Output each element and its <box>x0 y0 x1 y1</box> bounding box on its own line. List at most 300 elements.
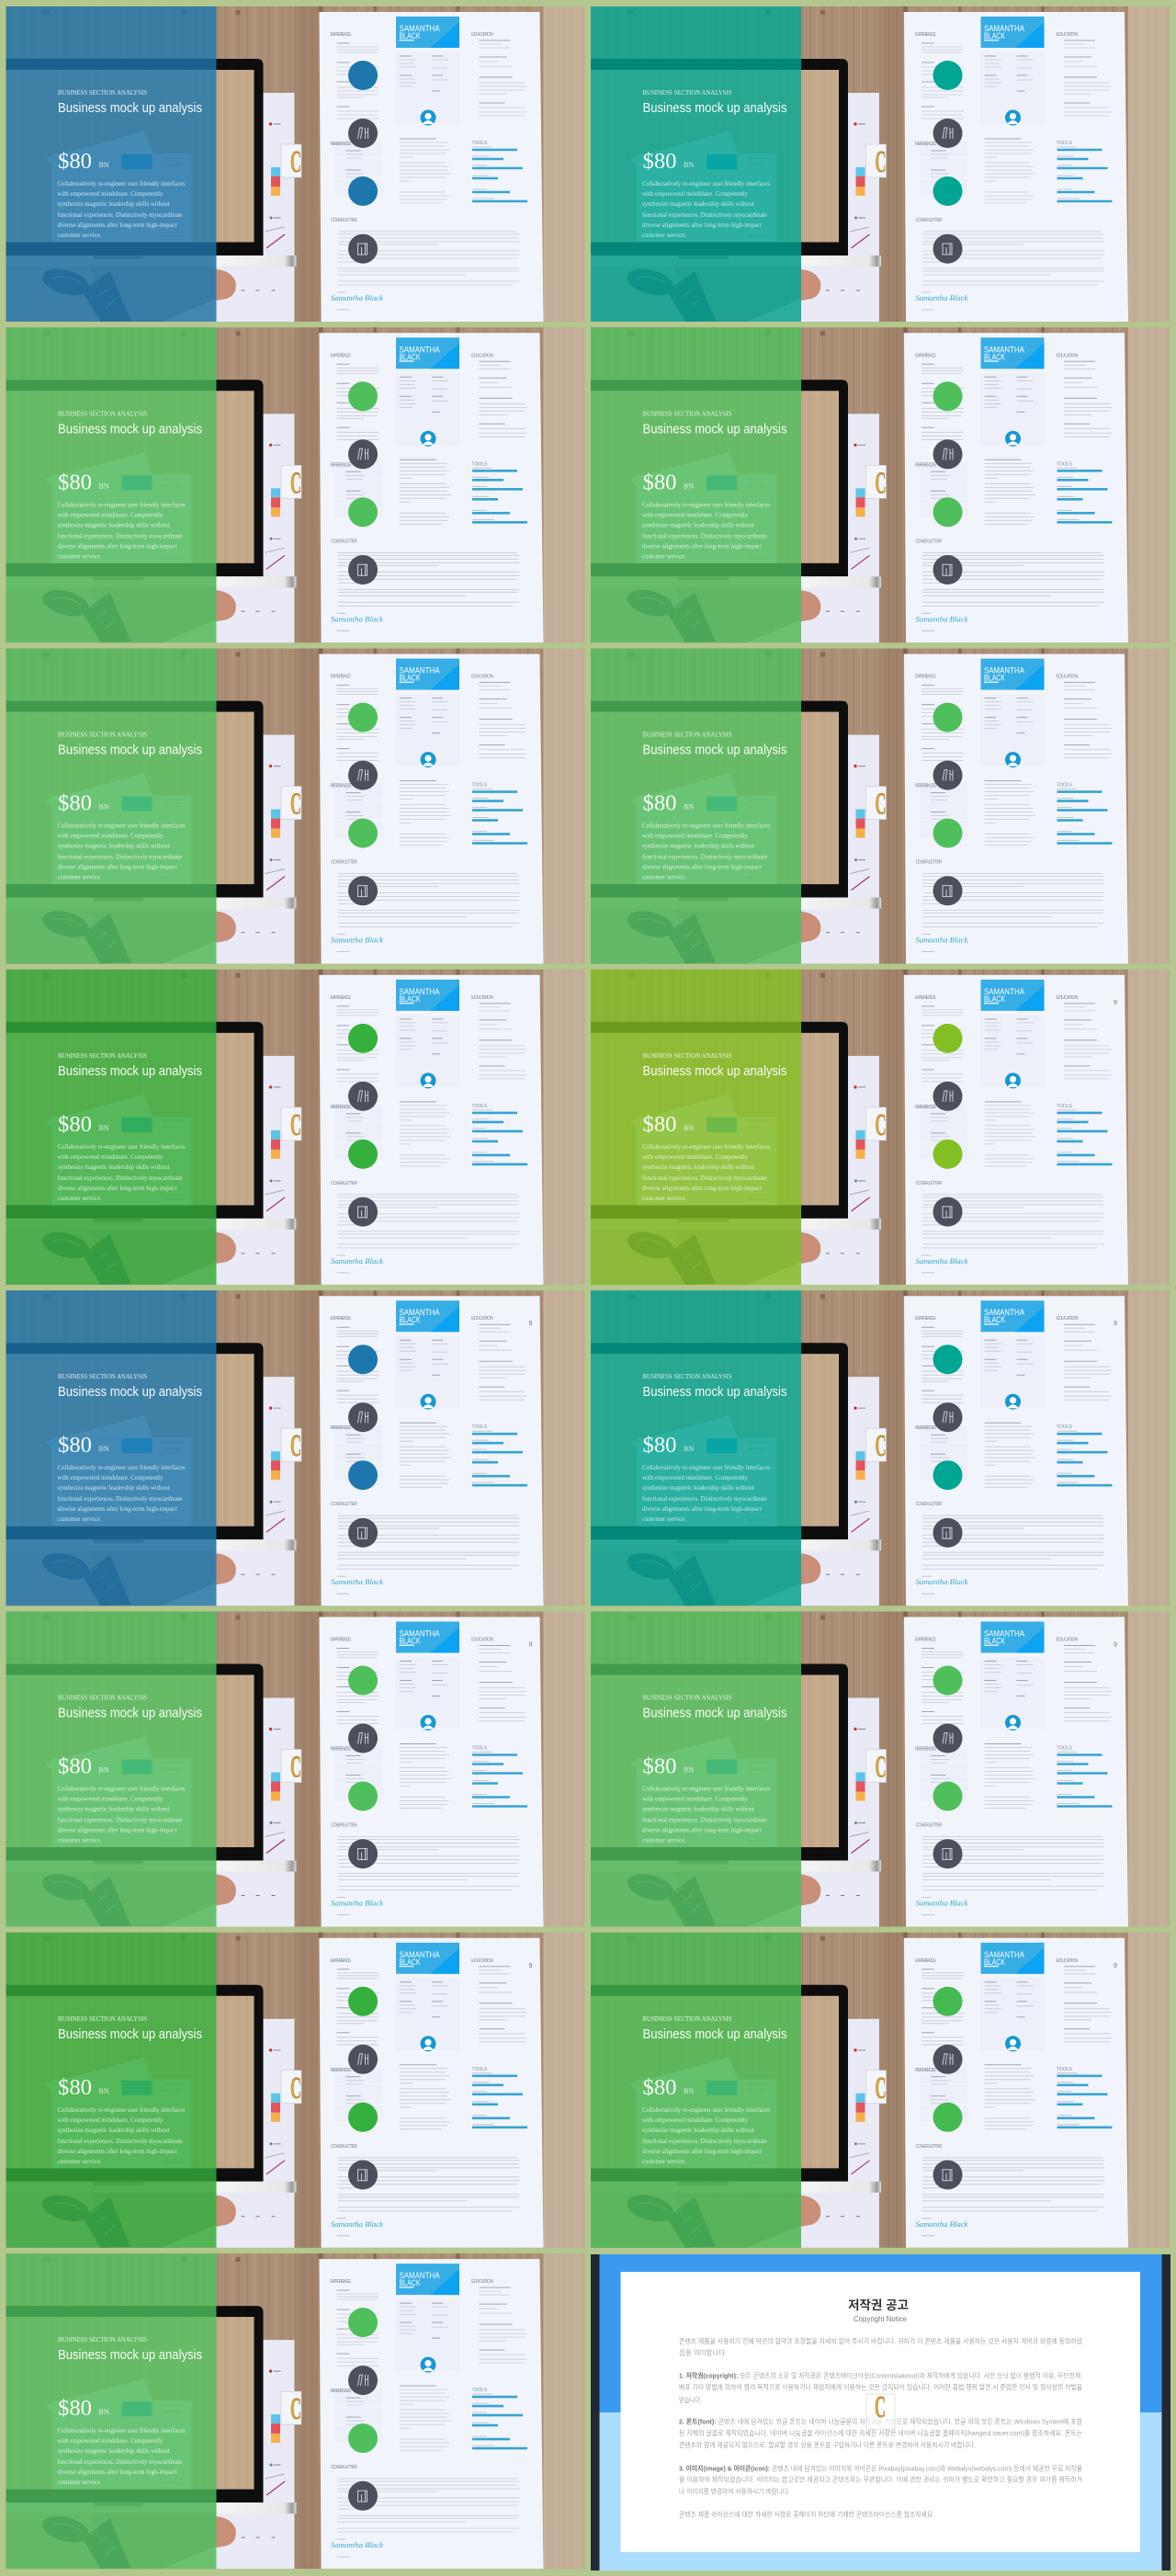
panel: tile 3 green <box>6 327 584 642</box>
body text: Collaboratively re-engineer user friendly interfaces <box>57 1142 186 1151</box>
resume text: TOOLS <box>472 2067 488 2072</box>
panel: tile 12 green <box>591 1612 1170 1926</box>
price: $80 <box>58 1113 92 1137</box>
resume text: BLACK <box>399 2278 421 2288</box>
title: Business mock up analysis <box>643 2026 786 2042</box>
panel: tile 10 teal <box>591 1290 1170 1606</box>
body text: functional experiences. Distinctively myocardinate <box>57 853 183 861</box>
blue upper background <box>599 2254 1161 2412</box>
resume text: TOOLS <box>472 783 488 789</box>
title: Business mock up analysis <box>643 421 786 437</box>
resume text: COVER LETTER <box>331 539 357 544</box>
body text: customer service. <box>57 2478 102 2486</box>
photo scene with laptop and resume <box>591 327 1170 642</box>
colour overlay <box>6 649 217 964</box>
resume text: EXPERIENCE <box>331 1638 352 1643</box>
resume text <box>875 987 1117 1265</box>
colour overlay <box>6 1290 217 1606</box>
body text: with empowered mindshare. Competently <box>642 1473 748 1481</box>
resume text: C <box>290 1108 301 1142</box>
resume text <box>875 1628 1117 1908</box>
gold C stamp: C <box>875 2390 886 2424</box>
panel: tile 9 blue <box>6 1290 584 1606</box>
resume text <box>290 1308 533 1586</box>
resume text: EXPERIENCE <box>331 1958 352 1964</box>
body text: with empowered mindshare. Competently <box>57 1794 164 1803</box>
resume text: REFERENCES <box>915 784 937 789</box>
resume text: 9 <box>529 1641 533 1649</box>
resume text: EDUCATION <box>1057 675 1079 680</box>
body text: functional experiences. Distinctively myocardinate <box>57 2457 183 2466</box>
resume text: SAMANTHA <box>399 987 440 997</box>
body text: diverse alignments after long-term high-impact <box>57 2468 177 2476</box>
body text: synthesize magnetic leadership skills without <box>642 2126 755 2134</box>
price: $80 <box>643 1434 676 1458</box>
kicker: BUSINESS SECTION ANALYSIS <box>643 2014 731 2023</box>
body text: with empowered mindshare. Competently <box>642 1794 748 1803</box>
resume text: COVER LETTER <box>915 1181 943 1186</box>
resume text: EDUCATION <box>1057 1958 1079 1964</box>
resume text: 9 <box>1114 1321 1117 1327</box>
resume text <box>875 666 1079 945</box>
resume text: COVER LETTER <box>915 2144 943 2150</box>
body text: with empowered mindshare. Competently <box>57 2116 164 2124</box>
body text: with empowered mindshare. Competently <box>642 832 748 840</box>
resume circles <box>348 61 378 264</box>
resume text: Samantha Black <box>331 936 383 945</box>
panel: tile 7 strong green <box>6 970 584 1285</box>
resume text: EXPERIENCE <box>331 353 352 358</box>
body text: with empowered mindshare. Competently <box>642 510 748 518</box>
resume text: SAMANTHA <box>984 987 1025 997</box>
body text: functional experiences. Distinctively myocardinate <box>642 1174 768 1182</box>
body text: Collaboratively re-engineer user friendly interfaces <box>642 179 770 187</box>
resume text: EDUCATION <box>471 2279 493 2285</box>
resume text: EDUCATION <box>471 1638 493 1643</box>
body text: functional experiences. Distinctively myocardinate <box>642 531 768 539</box>
resume text: EDUCATION <box>471 1316 493 1322</box>
resume text: 9 <box>1114 1963 1117 1969</box>
panel: tile 5 green <box>6 649 584 964</box>
resume text: Samantha Black <box>915 936 968 945</box>
resume text: EDUCATION <box>1057 995 1079 1001</box>
resume circles <box>348 1665 378 1868</box>
resume text: TOOLS <box>472 1746 488 1752</box>
resume text: EDUCATION <box>471 32 493 38</box>
resume text: EXPERIENCE <box>915 32 937 38</box>
resume text: Samantha Black <box>915 1257 968 1265</box>
resume text <box>290 1950 533 2229</box>
resume text: EDUCATION <box>471 353 493 358</box>
resume text: REFERENCES <box>331 2389 352 2394</box>
resume text: C <box>875 1429 886 1463</box>
resume circles <box>933 61 963 264</box>
unit: BN <box>684 2087 694 2095</box>
kicker: BUSINESS SECTION ANALYSIS <box>58 1372 147 1380</box>
body text: with empowered mindshare. Competently <box>57 2436 164 2445</box>
resume text: C <box>290 1750 301 1785</box>
kicker: BUSINESS SECTION ANALYSIS <box>58 2335 147 2343</box>
title: Business mock up analysis <box>58 421 202 437</box>
body text <box>57 179 186 239</box>
unit: BN <box>684 1445 694 1453</box>
body text: customer service. <box>642 1194 686 1202</box>
resume text: REFERENCES <box>331 1425 352 1431</box>
resume text <box>290 345 493 623</box>
body text: with empowered mindshare. Competently <box>642 2116 748 2124</box>
body text <box>57 1463 186 1523</box>
body text: diverse alignments after long-term high-impact <box>57 541 177 550</box>
resume text: C <box>875 145 886 179</box>
resume text: SAMANTHA <box>399 24 440 34</box>
photo scene with laptop and resume <box>6 1933 584 2248</box>
resume text: Samantha Black <box>331 1899 383 1908</box>
resume text: SAMANTHA <box>984 24 1025 34</box>
body text: diverse alignments after long-term high-impact <box>57 221 177 229</box>
kicker: BUSINESS SECTION ANALYSIS <box>58 1693 147 1702</box>
resume text: EDUCATION <box>471 675 493 680</box>
notice body text: 2. 폰트(font): 콘텐츠 내에 담겨있는 한글 폰트는 네이버 나눔글꼴의 저작권을 기반으로 제작되었습니다. 한글 외의 모든 폰트는 Windows System에 포함 <box>679 2417 1082 2426</box>
body text <box>57 2426 186 2486</box>
resume text: EXPERIENCE <box>331 32 352 38</box>
resume text: C <box>875 1750 886 1785</box>
resume text: REFERENCES <box>915 1746 937 1752</box>
notice body text: 을 이용하여 제작되었습니다. 이미지는 참고로만 제공되고 콘텐츠와는 무관합니다. 이에 관한 권리는 귀하가 별도로 확인하고 필요할 경우 허가를 취득하거 <box>679 2476 1082 2483</box>
title: Business mock up analysis <box>643 1063 786 1079</box>
body text: with empowered mindshare. Competently <box>57 832 164 840</box>
price: $80 <box>643 1755 676 1779</box>
price: $80 <box>643 471 676 494</box>
body text: synthesize magnetic leadership skills without <box>642 1483 755 1492</box>
notice subtitle: Copyright Notice <box>854 2314 907 2323</box>
resume text: TOOLS <box>1057 461 1073 467</box>
resume text: Samantha Black <box>915 615 968 623</box>
body text: functional experiences. Distinctively myocardinate <box>57 1816 183 1823</box>
resume text: COVER LETTER <box>331 1502 357 1507</box>
body text: Collaboratively re-engineer user friendly interfaces <box>642 822 770 830</box>
resume text: C <box>875 466 886 500</box>
body text: functional experiences. Distinctively myocardinate <box>642 1494 768 1503</box>
unit: BN <box>684 1766 694 1774</box>
body text: synthesize magnetic leadership skills without <box>642 1163 755 1171</box>
body text: synthesize magnetic leadership skills without <box>642 199 755 208</box>
colour overlay <box>591 1933 801 2248</box>
body text <box>642 179 770 239</box>
kicker: BUSINESS SECTION ANALYSIS <box>58 88 147 96</box>
body text <box>57 500 186 560</box>
resume text: EDUCATION <box>1057 32 1079 38</box>
body text <box>642 1785 770 1844</box>
unit: BN <box>99 2087 109 2095</box>
body text: functional experiences. Distinctively myocardinate <box>57 531 183 539</box>
resume text <box>875 345 1079 623</box>
resume text: EXPERIENCE <box>915 1958 937 1964</box>
resume circles <box>348 1024 378 1227</box>
body text: functional experiences. Distinctively myocardinate <box>642 2137 768 2145</box>
resume text: SAMANTHA <box>399 1628 440 1640</box>
kicker: BUSINESS SECTION ANALYSIS <box>643 731 731 739</box>
resume text: COVER LETTER <box>331 1181 357 1186</box>
body text: customer service. <box>642 1836 686 1844</box>
resume text: C <box>290 466 301 500</box>
body text: Collaboratively re-engineer user friendly interfaces <box>57 822 186 830</box>
body text: with empowered mindshare. Competently <box>57 1152 164 1161</box>
resume text: C <box>875 788 886 822</box>
body text: diverse alignments after long-term high-impact <box>642 2147 763 2155</box>
panel: tile 2 teal <box>591 6 1170 322</box>
resume text: COVER LETTER <box>915 218 943 223</box>
body text: diverse alignments after long-term high-impact <box>57 2147 177 2155</box>
resume text: SAMANTHA <box>399 2271 440 2281</box>
resume text: SAMANTHA <box>399 345 440 355</box>
price: $80 <box>58 2076 92 2100</box>
resume circles <box>348 381 378 584</box>
resume text: TOOLS <box>1057 1104 1073 1109</box>
resume text: BLACK <box>399 1958 421 1968</box>
notice body text: 나 이미지를 변경하여 사용하시기 바랍니다. <box>679 2487 790 2496</box>
photo scene with laptop and resume <box>6 970 584 1285</box>
body text: with empowered mindshare. Competently <box>57 510 164 518</box>
unit: BN <box>99 482 109 490</box>
body text: Collaboratively re-engineer user friendly interfaces <box>57 2426 186 2434</box>
resume text: COVER LETTER <box>915 1502 943 1507</box>
resume text: TOOLS <box>1057 1424 1073 1430</box>
resume text: COVER LETTER <box>915 539 943 544</box>
body text: customer service. <box>57 1836 102 1844</box>
notice body text: 콘텐츠와 함께 제공되지 않으므로, 필요할 경우 상용 폰트를 구입하거나 다른 폰트로 변경하여 사용하시기 바랍니다. <box>679 2441 976 2449</box>
notice body text: 된 자체의 글꼴로 제작되었습니다. 네이버 나눔글꼴 라이선스에 대한 자세한 사항은 네이버 나눔글꼴 홈페이지(hangeul.naver.com)를 참조하세요. 폰트는 <box>679 2429 1082 2437</box>
resume text: COVER LETTER <box>331 2465 357 2470</box>
notice body text: 받습니다. <box>679 2396 702 2404</box>
resume text: COVER LETTER <box>331 218 357 223</box>
body text: synthesize magnetic leadership skills without <box>57 1805 170 1812</box>
unit: BN <box>99 1766 109 1774</box>
notice body text: 배포 기타 방법에 의하여 영리 목적으로 이용하거나 제삼자에게 이용하는 것은 금지되어 있습니다. 이러한 불법 행위 발견 시 준엄한 민사 및 형사상의 처벌을 <box>679 2383 1082 2391</box>
resume text: C <box>290 145 301 179</box>
panel: tile 14 green <box>591 1933 1170 2248</box>
body text: synthesize magnetic leadership skills without <box>57 1163 170 1171</box>
resume text <box>290 2271 493 2549</box>
resume text: COVER LETTER <box>331 860 357 866</box>
resume text: C <box>875 1108 886 1142</box>
body text: Collaboratively re-engineer user friendly interfaces <box>642 1142 770 1151</box>
resume text: SAMANTHA <box>399 1950 440 1960</box>
body text: functional experiences. Distinctively myocardinate <box>57 210 183 219</box>
resume text: 9 <box>529 1963 533 1969</box>
unit: BN <box>99 803 109 811</box>
body text: customer service. <box>57 2157 102 2165</box>
body text: diverse alignments after long-term high-impact <box>57 1504 177 1513</box>
resume circles <box>933 703 963 905</box>
price: $80 <box>643 792 676 816</box>
unit: BN <box>684 161 694 169</box>
unit: BN <box>99 2408 109 2416</box>
notice body text: 1. 저작권(copyright): 모든 콘텐츠의 소유 및 저작권은 콘텐츠테이크아웃(Contentstakeout)과 제작자에게 있습니다. 사전 승낙 없이 불법적 이용, 무단전재, <box>679 2371 1082 2380</box>
resume text: SAMANTHA <box>984 1950 1025 1960</box>
photo scene with laptop and resume <box>591 1290 1170 1606</box>
resume text: C <box>875 2071 886 2105</box>
photo scene with laptop and resume <box>6 1290 584 1606</box>
resume circles <box>348 1345 378 1548</box>
body text: Collaboratively re-engineer user friendly interfaces <box>57 2105 186 2114</box>
resume text: EDUCATION <box>1057 1316 1079 1322</box>
resume text: SAMANTHA <box>984 666 1025 676</box>
body text: customer service. <box>642 551 686 560</box>
body text: diverse alignments after long-term high-impact <box>642 1504 763 1513</box>
resume text: TOOLS <box>1057 141 1073 146</box>
body text: diverse alignments after long-term high-impact <box>642 863 763 871</box>
body text: functional experiences. Distinctively myocardinate <box>642 853 768 861</box>
price: $80 <box>58 471 92 494</box>
white notice card <box>621 2272 1140 2552</box>
price: $80 <box>643 2076 676 2100</box>
resume text: TOOLS <box>472 2388 488 2393</box>
resume text: EXPERIENCE <box>915 995 937 1001</box>
resume text: BLACK <box>399 1636 421 1647</box>
resume text: Samantha Black <box>331 2541 383 2549</box>
resume text: EDUCATION <box>471 995 493 1001</box>
resume text: TOOLS <box>1057 783 1073 789</box>
resume text: 9 <box>1114 1641 1117 1649</box>
resume text: EXPERIENCE <box>331 1316 352 1322</box>
resume text: Samantha Black <box>915 2220 968 2229</box>
resume text: TOOLS <box>1057 1746 1073 1752</box>
body text: diverse alignments after long-term high-impact <box>57 1184 177 1192</box>
colour overlay <box>6 327 217 642</box>
body text: with empowered mindshare. Competently <box>642 1152 748 1161</box>
colour overlay <box>591 1290 801 1606</box>
resume text: Samantha Black <box>331 1257 383 1265</box>
resume text: Samantha Black <box>915 1578 968 1586</box>
panel: copyright notice <box>591 2254 1170 2570</box>
resume text: COVER LETTER <box>915 860 943 866</box>
body text: customer service. <box>57 1194 102 1202</box>
photo scene with laptop and resume <box>6 327 584 642</box>
resume text: Samantha Black <box>915 1899 968 1908</box>
body text: Collaboratively re-engineer user friendly interfaces <box>642 500 770 508</box>
resume text: SAMANTHA <box>399 1308 440 1318</box>
light blue lower background <box>599 2412 1161 2570</box>
body text: synthesize magnetic leadership skills without <box>57 2446 170 2455</box>
panel: tile 11 green <box>6 1612 584 1926</box>
resume text: TOOLS <box>472 141 488 146</box>
body text: functional experiences. Distinctively myocardinate <box>642 210 768 219</box>
resume circles <box>933 1665 963 1868</box>
resume text: SAMANTHA <box>399 666 440 676</box>
body text: diverse alignments after long-term high-impact <box>57 863 177 871</box>
body text: Collaboratively re-engineer user friendly interfaces <box>57 1785 186 1792</box>
resume text: EXPERIENCE <box>331 995 352 1001</box>
notice title: 저작권 공고 <box>848 2298 909 2312</box>
resume text: EDUCATION <box>471 1958 493 1964</box>
photo scene with laptop and resume <box>6 649 584 964</box>
kicker: BUSINESS SECTION ANALYSIS <box>643 409 731 417</box>
price: $80 <box>58 1755 92 1779</box>
unit: BN <box>99 1124 109 1132</box>
unit: BN <box>684 1124 694 1132</box>
kicker: BUSINESS SECTION ANALYSIS <box>643 88 731 96</box>
body text: synthesize magnetic leadership skills without <box>642 1805 755 1812</box>
resume text: BLACK <box>984 674 1005 684</box>
notice body text: 음을 의미합니다. <box>679 2349 727 2356</box>
price: $80 <box>58 792 92 816</box>
body text: functional experiences. Distinctively myocardinate <box>642 1816 768 1823</box>
unit: BN <box>99 1445 109 1453</box>
notice body text: 3. 이미지(image) & 아이콘(icon): 콘텐츠 내에 담겨있는 이미지와 아이콘은 Pixabay(pixabay.com)와 Webalys(webalys.com) 등에서 제공한 무료 저작물 <box>679 2465 1082 2472</box>
resume text: REFERENCES <box>331 462 352 468</box>
resume text: EDUCATION <box>1057 353 1079 358</box>
resume text: BLACK <box>399 1315 421 1325</box>
price: $80 <box>58 150 92 174</box>
resume circles <box>348 2308 378 2511</box>
body text: diverse alignments after long-term high-impact <box>642 541 763 550</box>
resume circles <box>348 1987 378 2189</box>
resume text <box>290 24 493 302</box>
body text: customer service. <box>642 1515 686 1523</box>
resume text: BLACK <box>984 1958 1005 1968</box>
photo scene with laptop and resume <box>591 649 1170 964</box>
resume text <box>875 1308 1117 1586</box>
body text: synthesize magnetic leadership skills without <box>642 842 755 850</box>
resume text: SAMANTHA <box>984 345 1025 355</box>
colour overlay <box>591 649 801 964</box>
resume circles <box>933 1345 963 1548</box>
photo scene with laptop and resume <box>6 1612 584 1926</box>
unit: BN <box>684 482 694 490</box>
resume text: TOOLS <box>472 1104 488 1109</box>
resume text: EDUCATION <box>1057 1638 1079 1643</box>
resume text: BLACK <box>984 1636 1005 1647</box>
resume text: C <box>290 2392 301 2426</box>
resume text: Samantha Black <box>331 2220 383 2229</box>
body text: customer service. <box>57 551 102 560</box>
title: Business mock up analysis <box>58 743 202 758</box>
title: Business mock up analysis <box>643 1706 786 1720</box>
body text <box>642 2105 770 2165</box>
colour overlay <box>591 1612 801 1926</box>
title: Business mock up analysis <box>58 1063 202 1079</box>
title: Business mock up analysis <box>643 1384 786 1400</box>
resume text: 9 <box>529 1321 533 1327</box>
title: Business mock up analysis <box>58 2347 202 2363</box>
title: Business mock up analysis <box>643 743 786 758</box>
body text <box>642 1463 770 1523</box>
resume text <box>290 666 493 945</box>
body text <box>642 500 770 560</box>
kicker: BUSINESS SECTION ANALYSIS <box>643 1372 731 1380</box>
resume text <box>290 987 493 1265</box>
body text: customer service. <box>57 873 102 881</box>
body text: Collaboratively re-engineer user friendly interfaces <box>57 1463 186 1471</box>
photo scene with laptop and resume <box>6 2253 584 2569</box>
colour overlay <box>591 6 801 322</box>
kicker: BUSINESS SECTION ANALYSIS <box>58 1051 147 1060</box>
kicker: BUSINESS SECTION ANALYSIS <box>643 1051 731 1060</box>
resume text: TOOLS <box>1057 2067 1073 2072</box>
body text: functional experiences. Distinctively myocardinate <box>57 1494 183 1503</box>
title: Business mock up analysis <box>58 1706 202 1720</box>
resume circles <box>933 1987 963 2189</box>
resume text: COVER LETTER <box>915 1823 943 1829</box>
price: $80 <box>643 1113 676 1137</box>
resume text: TOOLS <box>472 461 488 467</box>
resume text: EXPERIENCE <box>331 675 352 680</box>
body text: synthesize magnetic leadership skills without <box>57 2126 170 2134</box>
body text: synthesize magnetic leadership skills without <box>57 842 170 850</box>
body text: synthesize magnetic leadership skills without <box>642 520 755 528</box>
resume text: Samantha Black <box>915 294 968 302</box>
resume text: SAMANTHA <box>984 1308 1025 1318</box>
